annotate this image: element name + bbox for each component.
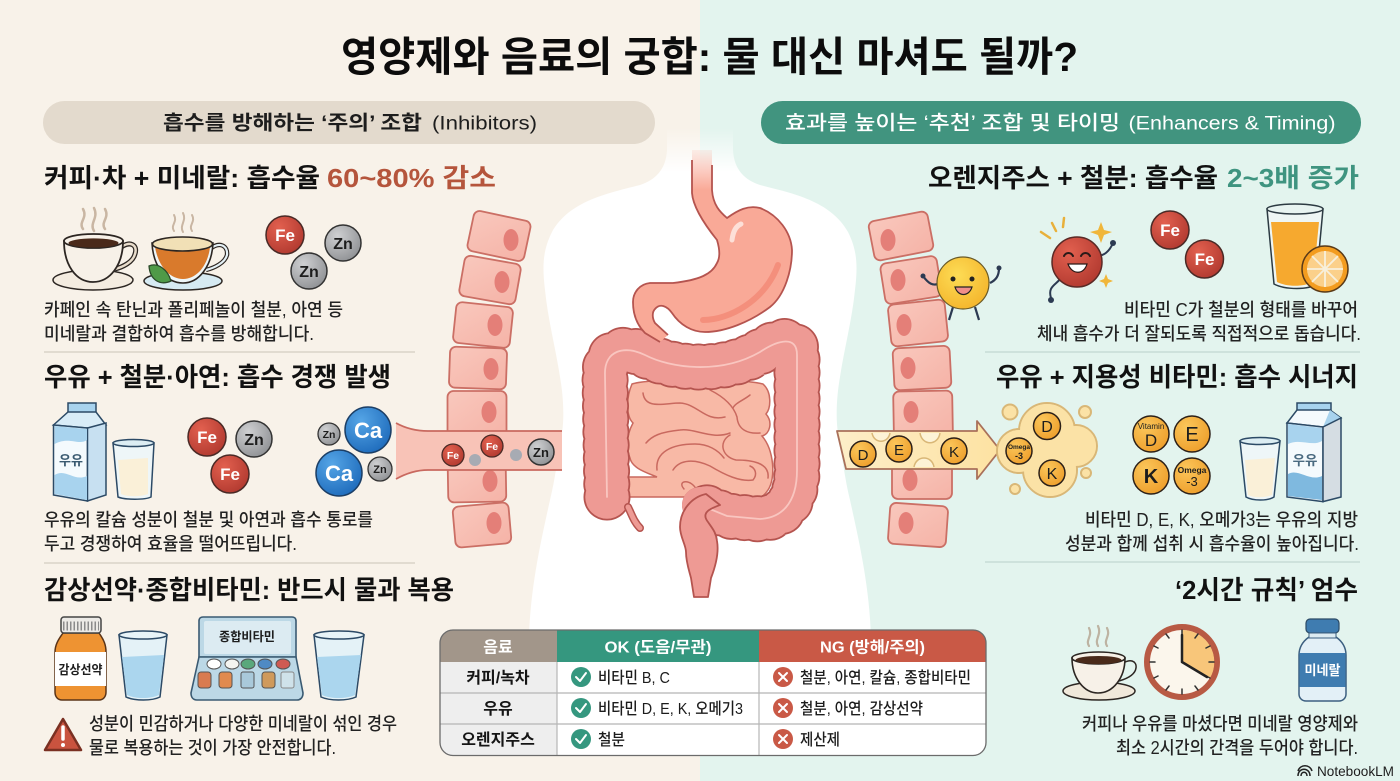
row: orange juice [461, 729, 840, 749]
icon: clock showing two hours [1147, 627, 1217, 697]
text block: milk explanation: 우유의 칼슘 성분이 철분 및 아연과 흡수 통로를 [44, 510, 373, 530]
epithelial cells [868, 211, 953, 547]
vitamins in channel: K [949, 444, 959, 461]
minerals: calcium crowding zinc: Ca [325, 461, 354, 486]
vitamins in channel [850, 436, 967, 467]
body silhouette [529, 128, 871, 660]
title: 영양제와 음료의 궁합: 물 대신 마셔도 될까? [341, 34, 1078, 80]
panel: inhibitors header pill: (Inhibitors) [432, 114, 537, 134]
icon: glass of milk [113, 440, 154, 499]
minerals: Fe Zn Zn: Zn [299, 264, 319, 281]
minerals: Fe Fe: Fe [1160, 221, 1180, 240]
absorption channel [396, 423, 562, 479]
panel: two hour rule [1063, 575, 1358, 758]
row: coffee and green tea: 철분, 아연, 칼슘, 종합비타민 [800, 669, 971, 687]
table header: NG (방해/주의) [820, 638, 925, 656]
icon: glass of water [119, 631, 167, 700]
panel: milk with iron and zinc [44, 362, 392, 554]
text block: milk explanation: 두고 경쟁하여 효율을 떨어뜨립니다. [44, 534, 297, 554]
vitamins in channel: E [894, 442, 904, 459]
vitamin capsules: Vitamin [1138, 422, 1164, 431]
icon: milk carton [54, 403, 106, 501]
minerals: Fe Zn Fe: Zn [244, 432, 264, 449]
panel: orange juice with iron [928, 163, 1361, 344]
text block: fat-soluble explanation: 성분과 합께 섭취 시 흡수율이 높아집니다. [1065, 534, 1359, 554]
icon: orange juice glass [1267, 204, 1348, 292]
large intestine [605, 341, 797, 519]
text block: vitamin C explanation: 체내 흡수가 더 잘되도록 직접적으로 돕습니다. [1037, 324, 1361, 344]
text block: two hour explanation: 최소 2시간의 간격을 두어야 합니다. [1116, 738, 1358, 758]
minerals: calcium crowding zinc: Zn [323, 429, 335, 441]
table header: 음료 [483, 638, 513, 656]
fat globule with vitamins: D [1041, 419, 1053, 436]
icon: mineral bottle: 미네랄 [1304, 663, 1341, 678]
panel: inhibitors header pill: 흡수를 방해하는 ‘주의’ 조합 [163, 112, 422, 134]
text block: two hour explanation [1082, 714, 1358, 758]
row: coffee and green tea: 비타민 B, C [598, 669, 670, 687]
icon: mineral bottle [1299, 619, 1346, 701]
heading: coffee tea minerals: 60~80% 감소 [327, 163, 496, 193]
appendix [628, 507, 640, 528]
heading: coffee tea minerals: 커피·차 + 미네랄: 흡수율 [44, 163, 320, 193]
row: milk: 비타민 D, E, K, 오메기3 [598, 700, 743, 718]
minerals in channel: Fe [486, 441, 498, 453]
minerals: Fe Zn Zn: Zn [333, 236, 353, 253]
icon: glass of milk [1240, 438, 1280, 500]
fat globule with vitamins: Omega [1008, 444, 1030, 451]
diagram: left epithelium with blocked minerals [396, 210, 562, 548]
icon: milk carton [1287, 403, 1341, 502]
diagram: digestive system [605, 150, 797, 597]
text block: fat-soluble explanation: 비타민 D, E, K, 오메가3는 우유의 지방 [1085, 510, 1358, 530]
fat globule with vitamins [997, 403, 1097, 497]
icon: coffee cup [1063, 626, 1136, 700]
row: coffee and green tea [466, 667, 971, 687]
icon: milk carton: 우유 [1293, 453, 1317, 468]
epithelial cells [448, 210, 532, 548]
panel: milk with fat-soluble vitamins [996, 362, 1359, 554]
heading: orange juice: 2~3배 증가 [1227, 163, 1359, 193]
minerals: Fe Zn Zn [266, 216, 361, 289]
minerals: calcium crowding zinc [316, 407, 392, 496]
table: OK and NG combinations [440, 630, 986, 756]
vitamin capsules: D [1145, 431, 1157, 450]
text block: water advice: 물로 복용하는 것이 가장 안전합니다. [89, 738, 336, 758]
icon: coffee cup [53, 208, 136, 290]
icon: second glass of water [314, 631, 364, 700]
text block: coffee explanation [44, 300, 343, 344]
row: orange juice: 오렌지주스 [461, 731, 535, 749]
heading: coffee tea minerals [44, 163, 496, 193]
vitamin capsules: Omega [1178, 465, 1207, 475]
text block: vitamin C explanation [1037, 300, 1361, 344]
row: milk: 철분, 아연, 감상선약 [800, 700, 923, 718]
minerals: calcium crowding zinc: Ca [354, 418, 383, 443]
diagram: right epithelium with fat-soluble vitamin arrow [837, 211, 1097, 547]
row: orange juice: 철분 [598, 731, 625, 749]
text block: coffee explanation: 미네랄과 결합하여 흡수를 방해합니다. [44, 324, 314, 344]
icon: multivitamin organizer [191, 617, 303, 700]
rectum [680, 494, 720, 597]
fat globule with vitamins: -3 [1015, 451, 1023, 461]
vitamin capsules: -3 [1186, 474, 1198, 489]
fat globule with vitamins: K [1047, 466, 1058, 483]
NotebookLM logo: NotebookLM [1317, 763, 1394, 779]
vitamin capsules: E [1185, 424, 1199, 446]
table header: OK (도음/무관) [604, 638, 712, 656]
panel: enhancers header pill: (Enhancers & Timing) [1128, 114, 1336, 134]
panel: coffee and tea with minerals [44, 163, 496, 344]
row: milk: 우유 [483, 701, 513, 718]
panel: thyroid medicine and multivitamin [44, 575, 454, 758]
icon: thyroid medicine bottle: 감상선약 [58, 663, 103, 677]
text block: coffee explanation: 카페인 속 탄닌과 폴리페놀이 철분, 아연 등 [44, 300, 343, 320]
heading: orange juice: 오렌지주스 + 철분: 흡수율 [928, 163, 1218, 193]
minerals: Fe Zn Fe [188, 418, 272, 493]
row: milk [483, 698, 923, 718]
heading: milk competition: 우유 + 철분·아연: 흡수 경쟁 발생 [44, 362, 391, 392]
heading: milk synergy: 우유 + 지용성 비타민: 흡수 시너지 [996, 362, 1358, 392]
heading: two hour rule: ‘2시간 규칙’ 엄수 [1175, 575, 1358, 605]
minerals: Fe Zn Fe: Fe [220, 465, 240, 484]
vitamin capsules: K [1144, 466, 1159, 488]
heading: orange juice [928, 163, 1359, 193]
minerals in channel [442, 435, 554, 466]
panel: enhancers header pill: 효과를 높이는 ‘추천’ 조합 및 타이밍 [785, 112, 1120, 134]
stomach and esophagus [633, 150, 792, 342]
text block: water advice: 성분이 민감하거나 다양한 미네랄이 섞인 경우 [89, 714, 397, 734]
text block: water advice [89, 714, 397, 758]
minerals: Fe Zn Fe: Fe [197, 428, 217, 447]
icon: milk carton: 우유 [59, 453, 83, 468]
vitamins in channel: D [858, 447, 869, 464]
minerals in channel: Zn [533, 445, 549, 460]
minerals in channel: Fe [447, 450, 459, 462]
icon: tea cup [144, 213, 227, 290]
panel: enhancers header pill [761, 101, 1361, 144]
vitamin capsules [1133, 416, 1210, 494]
minerals: Fe Fe: Fe [1195, 250, 1214, 269]
icon: smiling vitamin character [920, 257, 1002, 320]
heading: take with water: 감상선약·종합비타민: 반드시 물과 복용 [44, 575, 454, 605]
minerals: calcium crowding zinc: Zn [373, 464, 387, 476]
text block: fat-soluble explanation [1065, 510, 1359, 554]
minerals: Fe Zn Zn: Fe [275, 226, 295, 245]
minerals: Fe Fe [1151, 211, 1224, 278]
icon: thyroid medicine bottle [55, 617, 106, 700]
text block: vitamin C explanation: 비타민 C가 철분의 형태를 바꾸어 [1124, 300, 1358, 320]
panel: inhibitors header pill [43, 101, 655, 144]
row: orange juice: 제산제 [800, 731, 840, 749]
text block: two hour explanation: 커피나 우유를 마셨다면 미네랄 영양제와 [1082, 714, 1358, 734]
icon: multivitamin organizer: 종합비타민 [219, 629, 275, 644]
row: coffee and green tea: 커피/녹차 [466, 669, 530, 687]
table header [440, 630, 986, 662]
arrow: absorption into cell [837, 421, 1000, 479]
icon: happy iron character [1041, 218, 1116, 303]
text block: milk explanation [44, 510, 373, 554]
small intestine [622, 380, 773, 503]
icon: warning triangle [45, 719, 81, 750]
